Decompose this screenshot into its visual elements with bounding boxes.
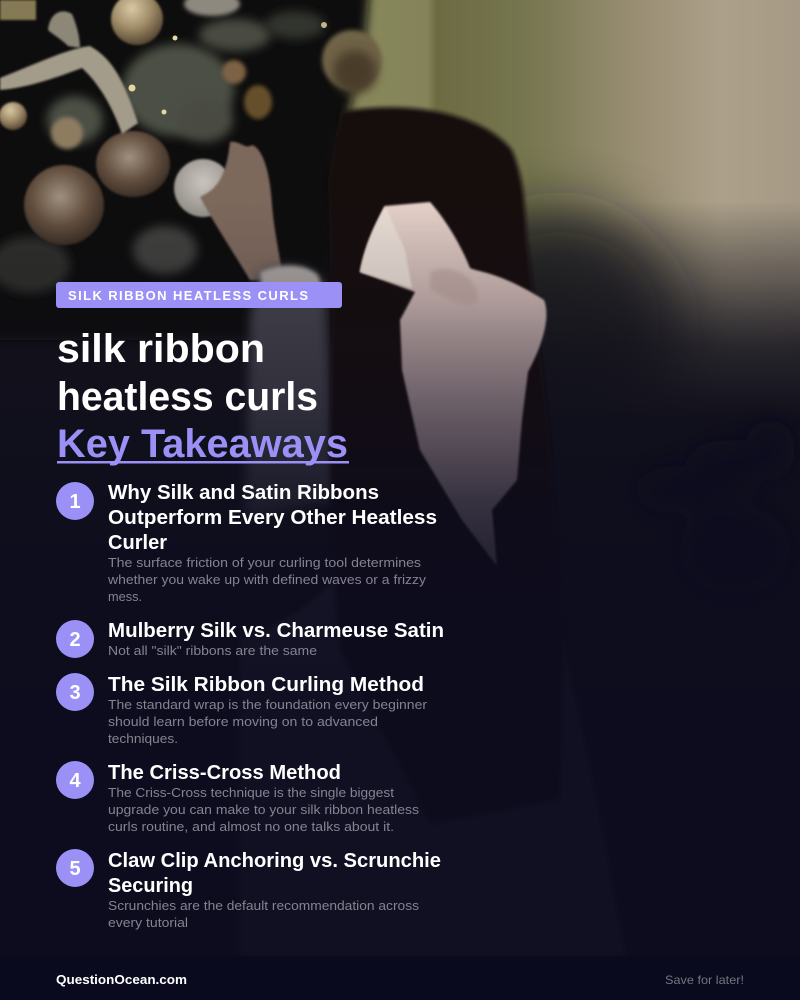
item 1 heading: Curler xyxy=(108,532,167,554)
blurred plant shadow on right xyxy=(635,420,795,595)
item 5 heading: Claw Clip Anchoring vs. Scrunchie xyxy=(108,850,441,872)
title: silk ribbon xyxy=(57,327,265,371)
item 4 xyxy=(56,761,420,834)
badge: topic tag: SILK RIBBON HEATLESS CURLS xyxy=(68,288,308,303)
number badge 5 xyxy=(56,849,94,887)
item 3 description: techniques. xyxy=(108,731,178,746)
number badge 3 xyxy=(56,673,94,711)
item 5 description: every tutorial xyxy=(108,915,188,930)
item 1 description: mess. xyxy=(108,589,142,604)
number badge 3: 3 xyxy=(69,682,81,704)
ornaments xyxy=(111,0,163,45)
title: heatless curls xyxy=(57,375,318,419)
item 4 description xyxy=(108,785,420,834)
item 1 description: whether you wake up with defined waves or a frizzy xyxy=(107,572,427,587)
item 3 heading: The Silk Ribbon Curling Method xyxy=(108,674,424,696)
silk bow xyxy=(360,202,546,566)
item 5 heading xyxy=(108,850,441,897)
footer site name: QuestionOcean.com xyxy=(56,972,187,987)
number badge 1: 1 xyxy=(69,491,81,513)
item 1 xyxy=(56,482,437,604)
item 4 description: curls routine, and almost no one talks about it. xyxy=(108,819,394,834)
item 5 description xyxy=(108,898,420,930)
item 2 heading: Mulberry Silk vs. Charmeuse Satin xyxy=(108,620,444,642)
item 3 description: should learn before moving on to advanced xyxy=(108,714,378,729)
number badge 4: 4 xyxy=(69,770,81,792)
item 3 description xyxy=(108,697,428,746)
item 5 heading: Securing xyxy=(108,875,193,897)
footer save prompt: Save for later! xyxy=(665,973,744,987)
hair xyxy=(328,107,565,825)
christmas tree xyxy=(0,0,382,340)
item 5 xyxy=(56,849,441,930)
number badge 5: 5 xyxy=(69,858,81,880)
item 2 description: Not all "silk" ribbons are the same xyxy=(108,643,317,658)
wall shadow left of light patch xyxy=(440,210,680,450)
number badge 4 xyxy=(56,761,94,799)
item 4 description: The Criss-Cross technique is the single biggest xyxy=(108,785,394,800)
title xyxy=(57,327,349,466)
hand xyxy=(200,142,282,280)
item 3 description: The standard wrap is the foundation every beginner xyxy=(108,697,428,712)
item 1 heading: Why Silk and Satin Ribbons xyxy=(108,482,379,504)
number badge 1 xyxy=(56,482,94,520)
sleeve xyxy=(245,266,335,520)
item 1 description xyxy=(107,555,427,604)
badge: topic tag xyxy=(56,282,342,308)
item 1 heading: Outperform Every Other Heatless xyxy=(108,507,437,529)
wall xyxy=(340,0,800,560)
footer bar xyxy=(0,956,800,1000)
number badge 2: 2 xyxy=(69,629,81,651)
item 1 description: The surface friction of your curling tool determines xyxy=(108,555,422,570)
title: Key Takeaways xyxy=(57,422,348,466)
sweater body xyxy=(240,540,625,956)
item 4 description: upgrade you can make to your silk ribbon heatless xyxy=(108,802,420,817)
number badge 2 xyxy=(56,620,94,658)
item 4 heading: The Criss-Cross Method xyxy=(108,762,341,784)
item 3 xyxy=(56,673,428,746)
item 5 description: Scrunchies are the default recommendation across xyxy=(108,898,420,913)
item 1 heading xyxy=(108,482,437,554)
item 2 xyxy=(56,620,444,658)
